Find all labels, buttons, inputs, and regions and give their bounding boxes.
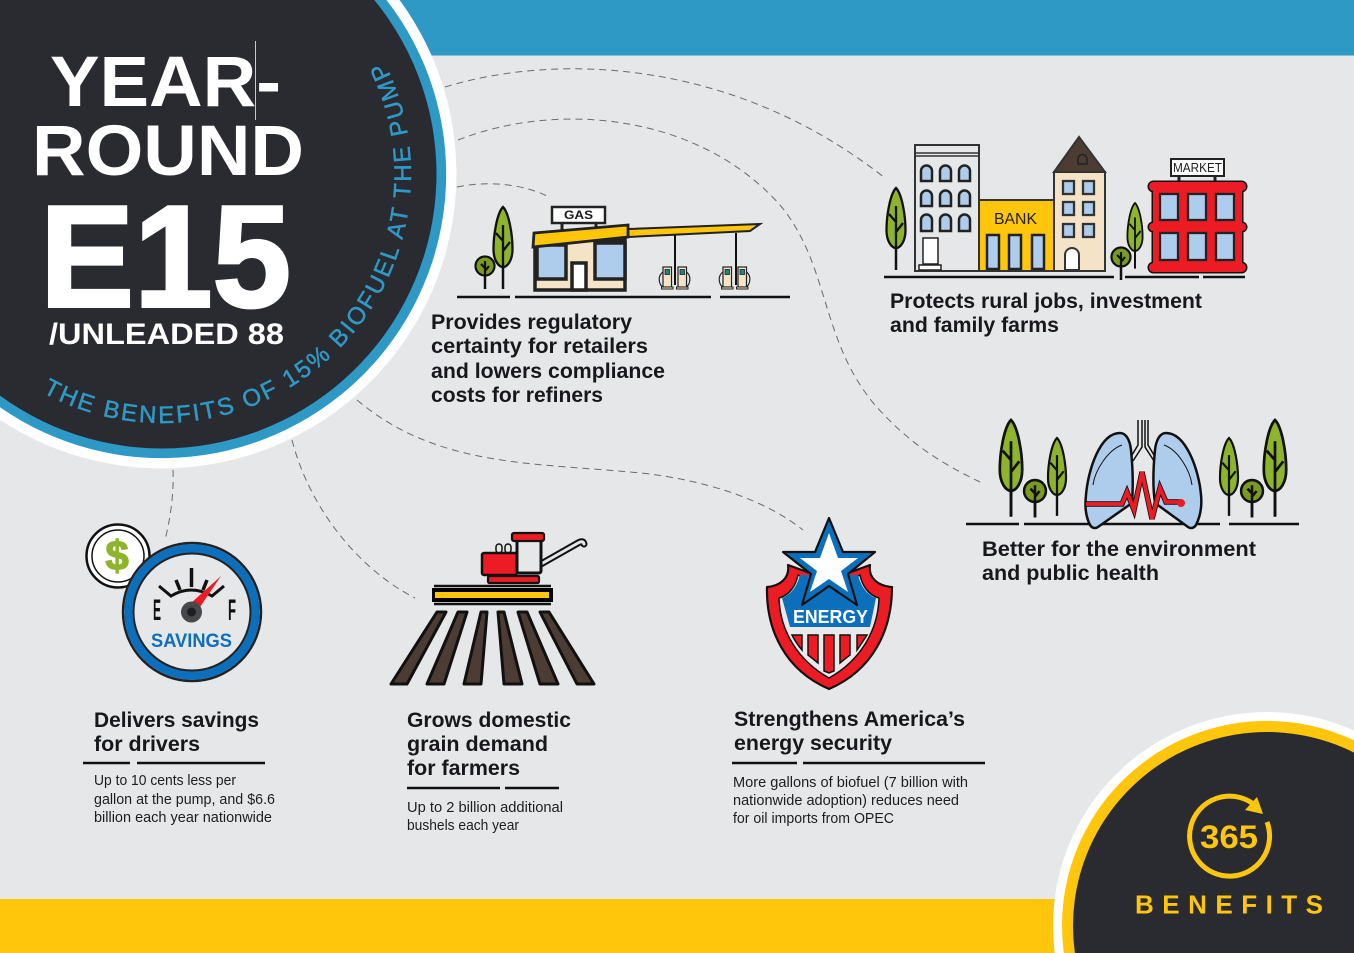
title: year-round: YEAR- <box>50 43 281 122</box>
icon: energy shield <box>767 518 892 689</box>
curved tagline: THE BENEFITS OF 15% BIOFUEL AT THE PUMP <box>48 67 412 424</box>
panel: 365 benefits badge <box>1053 712 1354 953</box>
panel: title circle <box>0 0 456 468</box>
icon: dollar coin <box>86 524 150 588</box>
icon: circular arrow <box>1190 796 1270 876</box>
bottom yellow band <box>0 899 1070 953</box>
text: provides regulatory certainty: and lowers compliance <box>431 360 665 383</box>
text: benefits: BENEFITS <box>1135 890 1323 920</box>
text: grows domestic grain demand: Up to 2 billion additional <box>407 799 563 816</box>
text: grows domestic grain demand: for farmers <box>407 757 520 780</box>
text: delivers savings: billion each year nationwide <box>94 809 272 826</box>
subtitle: unleaded 88: /UNLEADED 88 <box>49 318 284 351</box>
text: provides regulatory certainty: costs for refiners <box>431 384 603 407</box>
icon: savings fuel gauge <box>86 524 261 681</box>
text: delivers savings: Delivers savings <box>94 709 259 732</box>
text: strengthens america's energy security: More gallons of biofuel (7 billion with <box>733 774 968 791</box>
text: protects rural jobs: Protects rural jobs, investment <box>890 290 1202 313</box>
text: grows domestic grain demand <box>407 709 571 834</box>
icon: town buildings <box>884 137 1246 280</box>
text: provides regulatory certainty <box>431 311 665 407</box>
title: round: ROUND <box>32 112 304 191</box>
text: strengthens america's energy security: energy security <box>734 732 892 755</box>
text: strengthens america's energy security: nationwide adoption) reduces need <box>733 792 959 809</box>
text: strengthens america's energy security: Strengthens America’s <box>734 708 965 731</box>
icon: energy shield: ENERGY <box>793 607 868 627</box>
text: delivers savings: for drivers <box>94 733 200 756</box>
text: delivers savings: gallon at the pump, and $6.6 <box>94 791 275 808</box>
icon: gas station: GAS <box>564 208 593 222</box>
text: strengthens america's energy security <box>732 708 985 827</box>
text: delivers savings: Up to 10 cents less per <box>94 772 236 789</box>
text: better for the environment: Better for the environment <box>982 538 1256 561</box>
icon: dollar coin: $ <box>105 532 129 579</box>
icon: savings fuel gauge: SAVINGS <box>151 631 232 652</box>
icon: town buildings: BANK <box>994 211 1037 228</box>
dashed connector lines <box>165 69 980 598</box>
title: E15: E15 <box>40 176 291 338</box>
text: 365: 365 <box>1200 819 1258 855</box>
text: provides regulatory certainty: Provides regulatory <box>431 311 632 334</box>
icon: harvester and field <box>391 533 594 684</box>
text: grows domestic grain demand: bushels each year <box>407 817 519 834</box>
text: grows domestic grain demand: Grows domestic <box>407 709 571 732</box>
top blue band <box>380 0 1354 56</box>
icon: gas station <box>457 207 790 297</box>
text: provides regulatory certainty: certainty for retailers <box>431 335 648 358</box>
text: strengthens america's energy security: for oil imports from OPEC <box>733 810 894 827</box>
icon: lungs and trees <box>966 420 1299 528</box>
text: better for the environment: and public health <box>982 562 1159 585</box>
text: protects rural jobs <box>890 290 1202 337</box>
text: grows domestic grain demand: grain demand <box>407 733 548 756</box>
icon: savings fuel gauge: E <box>153 594 161 627</box>
icon: savings fuel gauge: F <box>228 594 236 627</box>
text: delivers savings <box>83 709 275 826</box>
icon: town buildings: MARKET <box>1173 161 1222 175</box>
text: better for the environment <box>982 538 1256 585</box>
text: protects rural jobs: and family farms <box>890 314 1059 337</box>
